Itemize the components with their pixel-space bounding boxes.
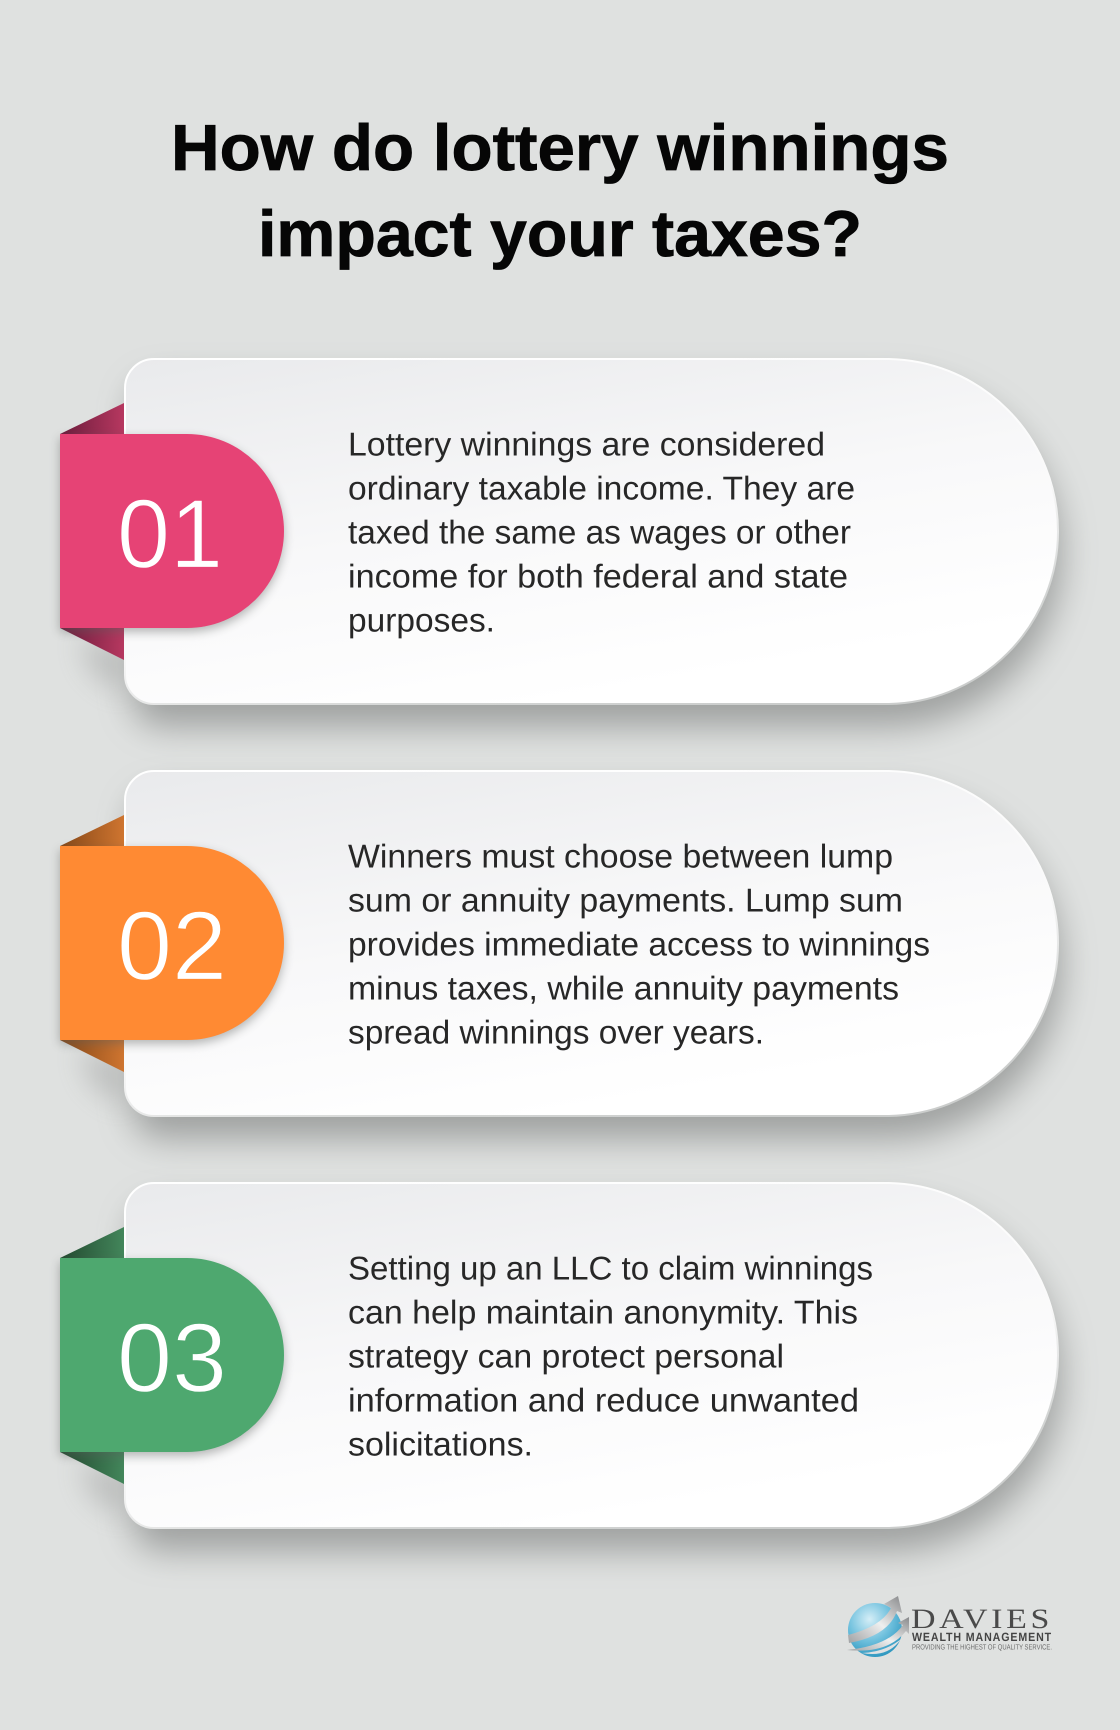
panel: step 01	[60, 359, 1062, 727]
number: 01	[117, 478, 223, 588]
step text: taxed the same as wages or other	[348, 514, 851, 550]
title: impact your taxes?	[258, 197, 862, 270]
logo: Davies Wealth Management	[847, 1596, 1053, 1657]
step text: minus taxes, while annuity payments	[348, 970, 899, 1006]
logo subtitle: WEALTH MANAGEMENT	[912, 1630, 1052, 1644]
step text: strategy can protect personal	[348, 1338, 784, 1374]
panel: step 03	[60, 1183, 1062, 1551]
panel: step 02	[60, 771, 1062, 1139]
step text: Lottery winnings are considered	[348, 426, 825, 462]
step text: sum or annuity payments. Lump sum	[348, 882, 903, 918]
step text	[348, 1250, 873, 1462]
folded ribbon corners	[60, 815, 124, 1072]
step text: income for both federal and state	[348, 558, 848, 594]
title	[171, 111, 949, 270]
step text	[348, 838, 930, 1050]
card	[125, 359, 1058, 704]
title: How do lottery winnings	[171, 111, 949, 184]
folded ribbon corners	[60, 1227, 124, 1484]
number badge	[60, 1258, 284, 1452]
logo tagline: PROVIDING THE HIGHEST OF QUALITY SERVICE.	[912, 1642, 1052, 1652]
number: 02	[117, 890, 227, 1000]
number: 03	[117, 1302, 227, 1412]
step text: purposes.	[348, 602, 495, 638]
card	[125, 771, 1058, 1116]
step text	[348, 426, 855, 638]
step text: solicitations.	[348, 1426, 533, 1462]
card	[125, 1183, 1058, 1528]
step text: ordinary taxable income. They are	[348, 470, 855, 506]
logo name: DAVIES	[911, 1604, 1053, 1635]
number badge	[60, 434, 284, 628]
number badge	[60, 846, 284, 1040]
step text: provides immediate access to winnings	[348, 926, 930, 962]
icon: globe with arrows	[847, 1596, 909, 1657]
step text: Setting up an LLC to claim winnings	[348, 1250, 873, 1286]
folded ribbon corners	[60, 403, 124, 660]
step text: spread winnings over years.	[348, 1014, 764, 1050]
step text: information and reduce unwanted	[348, 1382, 859, 1418]
step text: can help maintain anonymity. This	[348, 1294, 858, 1330]
step text: Winners must choose between lump	[348, 838, 893, 874]
